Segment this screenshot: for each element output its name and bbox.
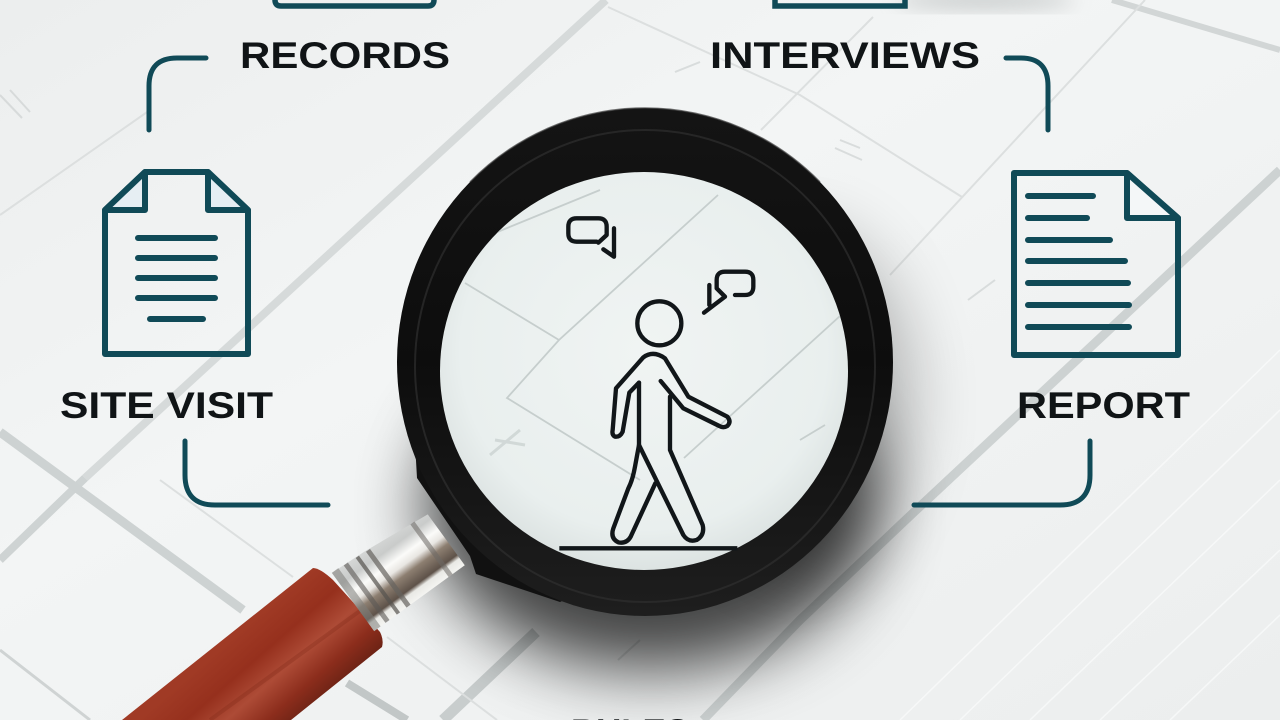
person head — [637, 301, 681, 345]
frame: top rim highlight — [470, 108, 820, 182]
frame: outer ring — [397, 108, 893, 616]
label: site visit: SITE VISIT — [60, 385, 273, 426]
label: records: RECORDS — [240, 35, 450, 76]
handle: metal ferrule — [332, 507, 465, 631]
frame: inner bevel line — [415, 130, 875, 602]
label: report: REPORT — [1017, 385, 1190, 426]
icon: interviews document (cropped) — [775, 0, 1075, 8]
icon: walking person — [559, 218, 753, 548]
arrow: connector top left — [149, 58, 206, 130]
floor line — [559, 542, 737, 555]
magnifying glass — [122, 108, 893, 720]
icon: site visit document — [105, 172, 248, 354]
lens — [440, 172, 848, 570]
person body — [612, 354, 729, 437]
arrow: connector bottom left — [185, 441, 328, 505]
handle: wood — [122, 568, 383, 720]
lens: paper lines — [465, 190, 840, 480]
magnifying glass shadow — [425, 230, 910, 670]
frame: boss at handle — [414, 420, 640, 602]
arrow: connector bottom right — [914, 441, 1090, 505]
speech bubble left — [568, 218, 614, 257]
icon: report document — [1014, 173, 1178, 355]
label: interviews: INTERVIEWS — [710, 35, 980, 76]
speech bubble right — [704, 272, 753, 313]
icon: records document (cropped) — [275, 0, 434, 6]
arrow: connector top right — [1006, 58, 1048, 130]
